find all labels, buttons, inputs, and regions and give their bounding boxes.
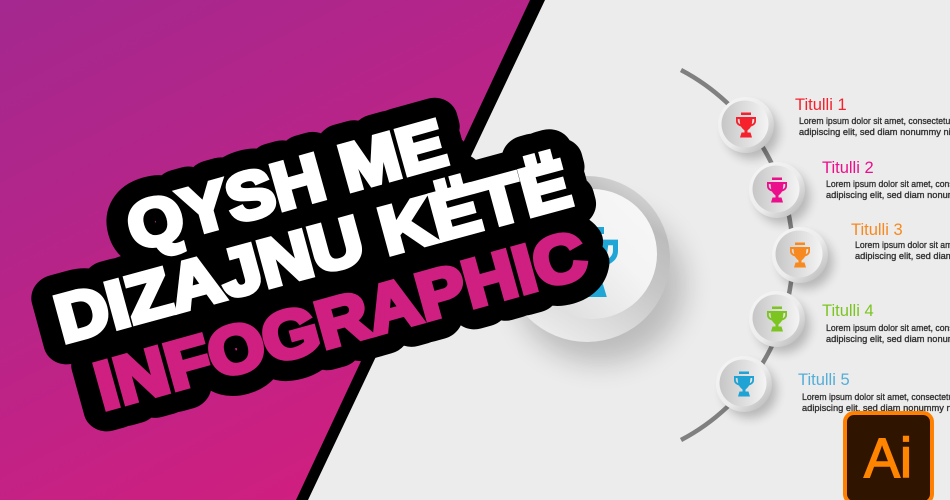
step 4 button	[749, 291, 810, 353]
step 5 title: Titulli 5	[798, 371, 850, 389]
step 1	[718, 96, 950, 159]
step 3 title: Titulli 3	[851, 221, 903, 239]
step 2	[749, 159, 950, 224]
step 1 title: Titulli 1	[795, 96, 847, 114]
step 3	[772, 221, 950, 289]
big circle with trophy	[504, 176, 685, 363]
black diagonal stripe	[296, 0, 545, 500]
curved timeline arc	[681, 70, 793, 440]
headline line 2: DIZAJNU KËTË	[47, 146, 578, 357]
headline outline	[47, 105, 595, 424]
step 1 button	[718, 97, 779, 159]
Adobe Illustrator icon	[845, 413, 932, 500]
step 5 text	[802, 392, 950, 414]
step 3 text	[855, 240, 950, 262]
step 5	[716, 356, 950, 418]
headline line 1: QYSH ME	[119, 105, 454, 264]
headline outline: DIZAJNU KËTË	[47, 146, 578, 357]
step 2 title: Titulli 2	[822, 159, 874, 177]
step 3 button	[772, 227, 833, 289]
Adobe Illustrator icon: Ai	[864, 426, 912, 489]
headline outline: QYSH ME	[119, 105, 454, 264]
step 5 button	[716, 356, 777, 418]
headline	[47, 105, 595, 424]
step 4	[749, 291, 950, 353]
step 2 text	[826, 179, 950, 201]
step 4 text	[826, 323, 950, 345]
headline line 3: INFOGRAPHIC	[87, 217, 595, 424]
magenta diagonal panel	[0, 0, 531, 500]
step 1 text	[799, 116, 950, 138]
headline outline: INFOGRAPHIC	[87, 217, 595, 424]
step 4 title: Titulli 4	[822, 302, 874, 320]
step 2 button	[749, 162, 810, 224]
